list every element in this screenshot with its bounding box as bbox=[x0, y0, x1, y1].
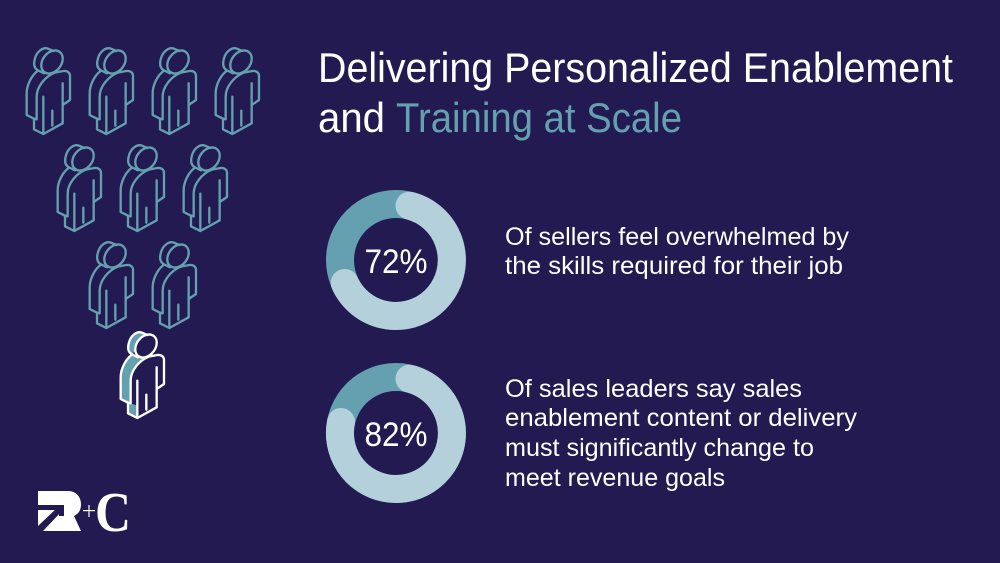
title: Delivering Personalized Enablement bbox=[318, 44, 953, 91]
icon: highlighted person bbox=[121, 330, 164, 418]
donut chart: 72%: 72% bbox=[364, 243, 428, 281]
donut chart: 82%: 82% bbox=[364, 416, 428, 454]
stat text: sellers bbox=[505, 223, 849, 280]
title: Training at Scale bbox=[396, 94, 682, 141]
donut chart: 72% bbox=[340, 204, 452, 316]
donut chart: 82% bbox=[340, 377, 452, 489]
icon group: crowd of people bbox=[27, 46, 259, 328]
logo: R+C: C bbox=[95, 482, 131, 544]
stat text: sales leaders: meet revenue goals bbox=[505, 464, 725, 492]
title bbox=[318, 44, 953, 141]
title: and bbox=[318, 94, 385, 141]
stat text: sales leaders bbox=[505, 375, 858, 492]
stat text: sales leaders: must significantly change to bbox=[505, 434, 814, 462]
stat text: sales leaders: enablement content or delivery bbox=[505, 404, 858, 432]
stat text: sellers: the skills required for their job bbox=[505, 252, 843, 280]
stat text: sellers: Of sellers feel overwhelmed by bbox=[505, 223, 849, 251]
stat text: sales leaders: Of sales leaders say sales bbox=[505, 375, 802, 403]
logo: R+C bbox=[38, 482, 131, 544]
